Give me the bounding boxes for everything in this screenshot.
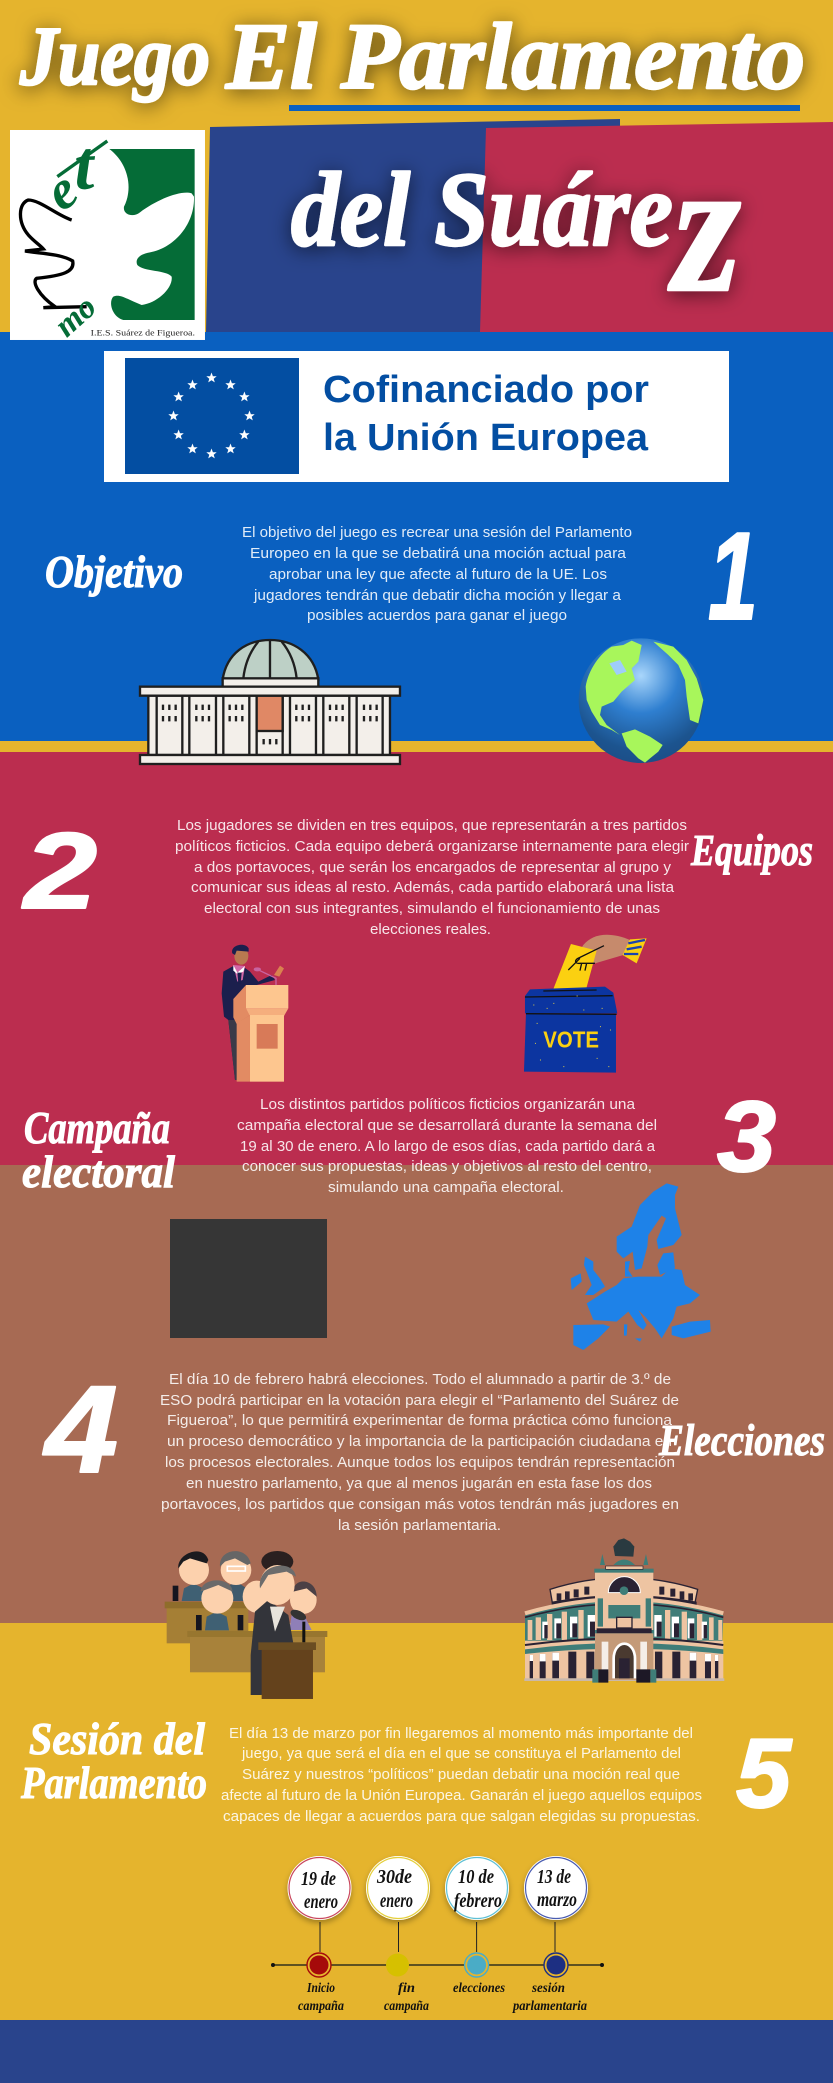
axis ends	[271, 1963, 604, 1967]
school logo: t	[73, 127, 98, 205]
text: sesión	[221, 1725, 702, 1825]
background: brown section	[0, 1165, 833, 1623]
text: objetivo: posibles acuerdos para ganar el juego	[307, 607, 567, 624]
milestone: 13 de marzo: 13 de	[537, 1866, 571, 1888]
number 1: 1	[708, 508, 758, 646]
milestone: 30 de enero: fin	[398, 1981, 415, 1996]
milestone: 30 de enero: 30de	[376, 1866, 412, 1888]
text: sesión: Suárez y nuestros “políticos” puedan debatir una moción real que	[242, 1766, 680, 1783]
milestone: 10 de febrero: 10 de	[458, 1866, 494, 1888]
footer band	[0, 2020, 833, 2083]
milestone: 19 de enero	[288, 1856, 352, 2014]
timeline	[271, 1856, 604, 2014]
text: elecciones: ESO podrá participar en la votación para elegir el “Parlamento del Suárez de	[160, 1392, 679, 1409]
text: elecciones: la sesión parlamentaria.	[338, 1517, 501, 1534]
background: yellow section	[0, 1623, 833, 2020]
heading: Campaña electoral: Campaña	[24, 1102, 170, 1153]
milestone: 30 de enero	[366, 1856, 430, 2014]
header blue panel	[206, 119, 620, 332]
icon: EU flag	[125, 358, 299, 474]
number 3: 3	[717, 1081, 776, 1193]
text: equipos: elecciones reales.	[370, 921, 491, 938]
text: campaña: conocer sus propuestas, ideas y objetivos al resto del centro,	[242, 1158, 652, 1175]
school logo: mo	[47, 288, 104, 344]
milestone: 19 de enero: Inicio	[306, 1981, 335, 1996]
background: yellow stripe	[0, 741, 833, 752]
title underline	[289, 105, 800, 111]
text: campaña	[237, 1096, 657, 1196]
icon: opera house	[524, 1538, 724, 1683]
school logo: I.E.S. Suárez de Figueroa.	[91, 329, 195, 338]
title: del Suárez: del Suáre	[291, 151, 706, 268]
text: campaña: campaña electoral que se desarrollará durante la semana del	[237, 1117, 657, 1134]
text: campaña: 19 al 30 de enero. A lo largo de esos días, cada partido dará a	[240, 1138, 656, 1155]
milestone: 13 de marzo: parlamentaria	[512, 1999, 587, 2014]
heading: Sesión del Parlamento: Parlamento	[20, 1757, 207, 1808]
timeline axis	[273, 1964, 602, 1966]
text: equipos: políticos ficticios. Cada equipo deberá organizarse internamente para elegir	[175, 838, 689, 855]
heading: Sesión del Parlamento: Sesión del	[29, 1713, 205, 1764]
header red panel	[480, 122, 833, 332]
EU text	[323, 369, 649, 459]
milestone: 30 de enero: enero	[380, 1890, 413, 1912]
text: elecciones: portavoces, los partidos que consigan más votos tendrán más jugadores en	[161, 1496, 679, 1513]
text: sesión: afecte al futuro de la Unión Europea. Ganarán el juego aquellos equipos	[221, 1787, 702, 1804]
background: yellow header	[0, 0, 833, 332]
icon: ballot box	[524, 935, 647, 1073]
milestone: 10 de febrero	[445, 1856, 509, 1996]
text: elecciones: en nuestro parlamento, ya que al menos jugarán en esta fase los dos	[186, 1475, 652, 1492]
EU text: Cofinanciado por	[323, 369, 649, 411]
text: equipos: comunicar sus ideas al resto. Además, cada partido elaborará una lista	[191, 879, 675, 896]
title: del Suárez	[291, 122, 741, 332]
milestone: 19 de enero: enero	[304, 1891, 338, 1913]
school logo: e	[34, 158, 89, 222]
text: equipos: Los jugadores se dividen en tres equipos, que representarán a tres partidos	[177, 817, 687, 834]
icon: speaker at podium	[222, 945, 288, 1082]
text: objetivo	[242, 524, 632, 624]
title: del Suárez: z	[667, 122, 741, 332]
text: equipos	[175, 817, 689, 938]
text: equipos: a dos portavoces, que serán los encargados de representar al grupo y	[194, 859, 671, 876]
connectors	[320, 1922, 555, 1952]
text: objetivo: Europeo en la que se debatirá una moción actual para	[250, 545, 627, 562]
milestone: 13 de marzo: marzo	[537, 1889, 577, 1911]
icon: ballot box: VOTE	[543, 1027, 599, 1053]
milestone: 13 de marzo	[512, 1856, 588, 2014]
text: sesión: El día 13 de marzo por fin llegaremos al momento más importante del	[229, 1725, 693, 1742]
heading: Objetivo: Objetivo	[45, 546, 183, 597]
number 5: 5	[736, 1718, 792, 1828]
milestone: 10 de febrero: elecciones	[453, 1981, 505, 1996]
text: elecciones: Figueroa”, lo que permitirá experimentar de forma práctica cómo funciona	[167, 1412, 673, 1429]
text: objetivo: El objetivo del juego es recrear una sesión del Parlamento	[242, 524, 632, 541]
icon: politicians in chamber	[165, 1551, 327, 1699]
text: sesión: juego, ya que será el día en el que se constituya el Parlamento del	[241, 1745, 681, 1762]
icon: map of Europe	[571, 1183, 711, 1350]
text: elecciones: un proceso democrático y la importancia de la participación ciudadana en	[167, 1433, 672, 1450]
text: equipos: electoral con sus integrantes, simulando el funcionamiento de unas	[204, 900, 660, 917]
text: elecciones	[160, 1371, 679, 1534]
milestone: 19 de enero: campaña	[298, 1999, 344, 2014]
title: Juego El Parlamento: El Parlamento	[225, 5, 805, 109]
title: Juego El Parlamento: Juego	[19, 10, 210, 103]
number 4: 4	[42, 1361, 118, 1499]
heading: Campaña electoral: electoral	[22, 1146, 175, 1197]
icon: parliament building	[140, 640, 400, 764]
number 2: 2	[22, 810, 97, 931]
milestone: 10 de febrero: febrero	[454, 1890, 502, 1912]
EU text: la Unión Europea	[323, 417, 649, 459]
heading: Sesión del Parlamento	[20, 1713, 207, 1808]
text: sesión: capaces de llegar a acuerdos para que salgan elegidas su propuestas.	[223, 1808, 700, 1825]
text: campaña: Los distintos partidos políticos ficticios organizarán una	[260, 1096, 636, 1113]
milestone: 30 de enero: campaña	[384, 1999, 429, 2014]
milestone: 13 de marzo: sesión	[531, 1981, 565, 1996]
milestone: 19 de enero: 19 de	[301, 1868, 336, 1890]
heading: Campaña electoral	[22, 1102, 175, 1197]
text: elecciones: El día 10 de febrero habrá elecciones. Todo el alumnado a partir de 3.º de	[169, 1371, 671, 1388]
school logo	[10, 127, 205, 344]
text: objetivo: aprobar una ley que afecte al futuro de la UE. Los	[269, 566, 607, 583]
background: blue section	[0, 332, 833, 741]
text: objetivo: jugadores tendrán que debatir dicha moción y llegar a	[253, 587, 622, 604]
dark square	[170, 1219, 327, 1338]
text: campaña: simulando una campaña electoral.	[328, 1179, 564, 1196]
icon: globe	[579, 638, 703, 763]
background: red section	[0, 752, 833, 1165]
EU co-funding panel	[104, 351, 729, 482]
text: elecciones: los procesos electorales. Aunque todos los equipos tendrán representación	[165, 1454, 675, 1471]
